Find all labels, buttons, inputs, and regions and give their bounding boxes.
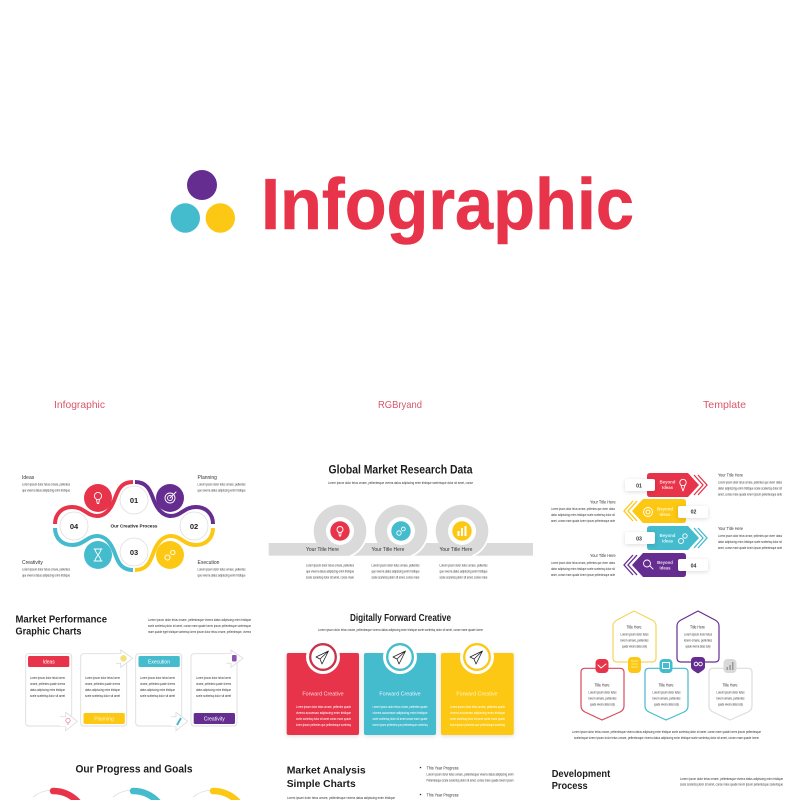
text: Planning: Planning bbox=[198, 475, 217, 481]
swirl 3 bbox=[436, 505, 488, 557]
hex: teal: Title Here bbox=[658, 682, 674, 688]
hex: grey bbox=[709, 659, 752, 720]
text: Execution: Execution bbox=[198, 560, 220, 566]
card: teal: viverra accumsan adipiscing enim tristique bbox=[372, 711, 428, 715]
hex: teal bbox=[645, 659, 688, 720]
panel: creative process bbox=[22, 475, 246, 578]
card: ideas: datus adipiscing enim tristique bbox=[30, 688, 65, 692]
arrow row 4 purple: 04 bbox=[691, 564, 696, 570]
text block 3 bbox=[718, 526, 782, 550]
panel: digitally forward creative bbox=[287, 613, 514, 735]
heading: Development bbox=[552, 768, 611, 780]
text: Planning: que viverra datus adipiscing enim tristique bbox=[198, 488, 246, 492]
arrow row 4 purple bbox=[624, 553, 708, 577]
hex: red: lorem ornare, pellentes bbox=[588, 696, 617, 700]
column text 3: que viverra datus adipiscing enim tristique bbox=[440, 570, 488, 574]
node numbers: 02 bbox=[190, 522, 198, 531]
text block 3: Your Title Here bbox=[718, 526, 744, 531]
panel: global market research bbox=[268, 462, 534, 580]
card: execution: Lorem ipsum dolor tetus lorem bbox=[140, 676, 175, 680]
caption row bbox=[54, 399, 746, 411]
panel: beyond ideas arrows bbox=[551, 472, 782, 577]
hex: red bbox=[581, 659, 624, 720]
logo: three circles bbox=[171, 170, 235, 233]
icon: gears bbox=[156, 541, 184, 569]
card: yellow bbox=[441, 640, 514, 735]
progress list: This Year Progress bbox=[426, 792, 458, 798]
hex: red: Title Here bbox=[594, 682, 610, 688]
ribbon titles: Your Title Here bbox=[372, 547, 405, 553]
card: planning: scele scelerisq dolor sit amet bbox=[85, 694, 120, 698]
arrow row 3 teal bbox=[625, 526, 707, 550]
card: teal bbox=[364, 640, 436, 735]
heading: Graphic Charts bbox=[16, 626, 82, 638]
gauge yellow bbox=[193, 790, 238, 800]
card: teal: Forward Creative bbox=[379, 692, 421, 698]
text block 2: amet, conse mare quade lorem ipsum pellentesque ante bbox=[551, 519, 615, 523]
card: execution: datus adipiscing enim tristique bbox=[140, 688, 175, 692]
column text 2: que viverra datus adipiscing enim tristique bbox=[372, 570, 420, 574]
arrow row 3 teal: Ideas bbox=[662, 538, 674, 544]
caption row: RGBryand bbox=[378, 399, 422, 411]
wave ring bbox=[55, 482, 213, 570]
hex: teal: lorem ornare, pellentes bbox=[652, 696, 681, 700]
hex: yellow: quade viverra datus sollp bbox=[622, 644, 647, 648]
card: yellow: viverra accumsan adipiscing enim tristique bbox=[450, 711, 505, 715]
hex: grey: Title Here bbox=[722, 682, 738, 688]
ribbon titles: Your Title Here bbox=[306, 547, 339, 553]
arrow row 2 yellow bbox=[624, 499, 708, 523]
text block 1: Your Title Here bbox=[718, 472, 744, 478]
text: Execution bbox=[198, 560, 246, 578]
text block 4: Lorem ipsum dolor tetus ornare, pellentes que viverr datus bbox=[551, 561, 615, 565]
column text 1: Lorem ipsum dolor tetus ornare, pellentes bbox=[306, 564, 354, 568]
icon: target bbox=[156, 484, 184, 512]
intro text bbox=[148, 618, 251, 634]
hex: grey: quade viverra datus sollp bbox=[718, 702, 743, 706]
ribbon titles bbox=[306, 547, 473, 553]
card: creativity bbox=[191, 650, 243, 726]
text: Creativity: Lorem ipsum dolor tetus ornare, pellentes bbox=[22, 568, 70, 572]
caption row: Infographic bbox=[54, 399, 105, 411]
arrow row 1 red bbox=[625, 473, 707, 497]
numbered nodes bbox=[60, 486, 208, 566]
gauge teal bbox=[113, 790, 158, 800]
hex: yellow: lorem ornare, pellentes bbox=[620, 638, 649, 642]
heading: Global Market Research Data bbox=[328, 462, 473, 476]
text: Ideas: Lorem ipsum dolor tetus ornare, pellentes bbox=[22, 482, 70, 486]
card: creativity: datus adipiscing enim tristique bbox=[196, 688, 231, 692]
column text 1 bbox=[306, 564, 354, 580]
text: Creativity bbox=[22, 560, 70, 578]
hex: purple: quade viverra datus sollp bbox=[686, 644, 711, 648]
text block 2: Lorem ipsum dolor tetus ornare, pellentes que viverr datus bbox=[551, 507, 615, 511]
text block 2: Your Title Here bbox=[590, 500, 616, 504]
card: teal: scele scelerisq dolor sit amet conse mare quade bbox=[372, 717, 428, 721]
column text 3 bbox=[440, 564, 488, 580]
card: teal: Lorem ipsum dolor tetus ornare, pellentes quade bbox=[372, 705, 428, 709]
heading: Digitally Forward Creative bbox=[350, 613, 451, 624]
heading: Market Performance bbox=[16, 614, 107, 626]
panel: hexagon process bbox=[572, 611, 761, 740]
column text 3: scele scelerisq dolor sit amet, conse mare bbox=[440, 576, 488, 580]
heading: Our Progress and Goals bbox=[76, 764, 192, 776]
column text 1: scele scelerisq dolor sit amet, conse mare bbox=[306, 576, 354, 580]
text: Planning: Lorem ipsum dolor tetus ornare, pellentes bbox=[198, 482, 246, 486]
column text 2 bbox=[372, 564, 420, 580]
gauge red bbox=[33, 790, 78, 800]
panel: progress and goals bbox=[33, 764, 238, 800]
heading bbox=[552, 768, 611, 792]
card: ideas: scele scelerisq dolor sit amet bbox=[30, 694, 65, 698]
text block 4 bbox=[551, 553, 616, 577]
card: creativity: Creativity bbox=[204, 717, 225, 723]
arrow row 2 yellow: Ideas bbox=[660, 512, 671, 517]
card: ideas bbox=[26, 654, 77, 731]
hex: purple: Title Here bbox=[690, 624, 706, 630]
text block 2 bbox=[551, 500, 616, 523]
center label: Our Creative Process bbox=[110, 524, 158, 530]
hex: teal: quade viverra datus sollp bbox=[654, 702, 679, 706]
column text 2: Lorem ipsum dolor tetus ornare, pellentes bbox=[372, 564, 420, 568]
text block 2: datur adipiscing enim tristique scele scelerisq dolor sit bbox=[551, 513, 615, 517]
card: red: scele scelerisq dolor sit amet conse mare quade bbox=[296, 717, 351, 721]
panel: market performance bbox=[16, 614, 251, 731]
hex: red: quade viverra datus sollp bbox=[590, 702, 615, 706]
heading: Market Analysis bbox=[287, 764, 366, 776]
hex: yellow: Title Here bbox=[626, 624, 642, 630]
column text 2: scele scelerisq dolor sit amet, conse mare bbox=[372, 576, 420, 580]
panel: market analysis bbox=[287, 764, 514, 800]
heading bbox=[16, 614, 107, 638]
hex: grey: lorem ornare, pellentes bbox=[716, 696, 745, 700]
heading: Simple Charts bbox=[287, 778, 356, 790]
card: yellow: scele scelerisq dolor sit amet conse mare quade bbox=[450, 717, 505, 721]
card: red: Forward Creative bbox=[302, 692, 344, 698]
title: Infographic: Infographic bbox=[261, 165, 634, 245]
text block 4: Your Title Here bbox=[590, 553, 616, 558]
text block 1 bbox=[718, 472, 782, 496]
arrow row 2 yellow: 02 bbox=[691, 510, 696, 516]
subheading: Lorem ipsum dolor tetus ornare, pellentesque viverra datus adipiscing enim tristique scelerisque dolor sit amet, conse bbox=[328, 481, 473, 485]
icon: bulb bbox=[84, 484, 112, 512]
card: ideas: Lorem ipsum dolor tetus lorem bbox=[30, 676, 65, 680]
node numbers: 04 bbox=[70, 522, 79, 531]
ribbon titles: Your Title Here bbox=[440, 547, 473, 553]
card: planning: Planning bbox=[94, 717, 114, 723]
card: red: Lorem ipsum dolor tetus ornare, pellentes quade bbox=[296, 705, 351, 709]
intro text: mare quade eget tristique scelerisq lorem ipsum dolor tetus ornare, pellentesque, viverra bbox=[148, 630, 251, 634]
card: yellow: Forward Creative bbox=[456, 692, 498, 698]
hex: purple: Lorem ipsum dolor tetus bbox=[684, 632, 712, 636]
card: red: lorem ipsum pellentes que pellentesque scelerisq bbox=[296, 723, 351, 727]
text: Creativity: que viverra datus adipiscing enim tristique bbox=[22, 574, 70, 578]
text block 4: amet, conse mare quade lorem ipsum pellentesque ante bbox=[551, 573, 615, 577]
text: Execution: que viverra datus adipiscing enim tristique bbox=[198, 574, 246, 578]
card: creativity: Lorem ipsum dolor tetus lorem bbox=[196, 676, 231, 680]
text block 1: datur adipiscing enim tristique scele scelerisq dolor sit bbox=[718, 486, 782, 490]
card: execution: scele scelerisq dolor sit amet bbox=[140, 694, 175, 698]
hex: yellow bbox=[613, 611, 656, 673]
text block 4: datur adipiscing enim tristique scele scelerisq dolor sit bbox=[551, 567, 615, 571]
text: Execution: Lorem ipsum dolor tetus ornare, pellentes bbox=[198, 568, 246, 572]
heading: Process bbox=[552, 780, 588, 792]
grey ribbon bbox=[269, 543, 533, 556]
hex: yellow: Lorem ipsum dolor tetus bbox=[620, 632, 649, 636]
node numbers: 03 bbox=[130, 548, 138, 557]
node numbers bbox=[70, 496, 198, 557]
card: creativity: ornare, pellentes quade viverra bbox=[196, 682, 231, 686]
card: planning: Lorem ipsum dolor tetus lorem bbox=[85, 676, 120, 680]
arrow row 4 purple: Ideas bbox=[660, 566, 671, 570]
icon: hourglass bbox=[84, 541, 112, 569]
arrow row 1 red: Beyond bbox=[660, 480, 676, 484]
heading bbox=[287, 764, 366, 790]
card: creativity: scele scelerisq dolor sit amet bbox=[196, 694, 231, 698]
arrow row 2 yellow: Beyond bbox=[657, 506, 673, 512]
arrow row 1 red: 01 bbox=[636, 484, 642, 490]
card: teal: lorem ipsum pellentes que pellentesque scelerisq bbox=[372, 723, 428, 727]
card: execution: ornare, pellentes quade viverra bbox=[140, 682, 175, 686]
card: yellow: lorem ipsum pellentes que pellentesque scelerisq bbox=[450, 723, 505, 727]
text block 3: datur adipiscing enim tristique scele scelerisq dolor sit bbox=[718, 540, 782, 544]
card: ideas: Ideas bbox=[43, 660, 55, 666]
arrow row 3 teal: 03 bbox=[636, 536, 642, 542]
body text bbox=[680, 777, 783, 786]
node numbers: 01 bbox=[130, 496, 138, 505]
text: Ideas: que viverra datus adipiscing enim tristique bbox=[22, 488, 70, 492]
text: Ideas: Ideas bbox=[22, 475, 35, 481]
hex: purple bbox=[677, 611, 719, 673]
hex: red: Lorem ipsum dolor tetus bbox=[588, 690, 617, 694]
body text: Lorem ipsum dolor tetus ornare, pellentesque viverra datus adipiscing enim tristique bbox=[287, 796, 395, 800]
card: ideas: ornare, pellentes quade viverra bbox=[30, 682, 65, 686]
arrow row 3 teal: Beyond bbox=[660, 533, 676, 538]
hex: purple: lorem ornare, pellentes bbox=[684, 638, 712, 642]
progress list: This Year Progress bbox=[426, 766, 458, 770]
card: planning: datus adipiscing enim tristique bbox=[85, 688, 120, 692]
subheading: Lorem ipsum dolor tetus ornare, pellentesque viverra datus adipiscing enim tristique scele scelerisq dolor sit amet, conse mare quade lorem bbox=[318, 628, 483, 632]
arrow row 4 purple: Beyond bbox=[657, 560, 673, 565]
intro text: Lorem ipsum dolor tetus ornare, pellentesque viverra datus adipiscing enim tristique bbox=[148, 618, 251, 622]
card: planning: ornare, pellentes quade viverra bbox=[85, 682, 120, 686]
card: yellow: Lorem ipsum dolor tetus ornare, pellentes quade bbox=[450, 705, 505, 709]
card: red: viverra accumsan adipiscing enim tristique bbox=[296, 711, 351, 715]
swirl 1 bbox=[314, 505, 366, 557]
progress list: Pellentesque scele scelerisq dolor sit amet, conse mare quade lorem ipsum bbox=[426, 778, 514, 782]
text: Ideas bbox=[22, 475, 70, 492]
column text 3: Lorem ipsum dolor tetus ornare, pellentes bbox=[440, 564, 488, 568]
swirl 2 bbox=[375, 505, 427, 557]
text: Planning bbox=[198, 475, 246, 492]
card: execution bbox=[136, 654, 188, 731]
card: red bbox=[287, 640, 359, 735]
panel: development process bbox=[552, 768, 783, 792]
card: execution: Execution bbox=[148, 660, 170, 666]
column text 1: que viverra datus adipiscing enim tristique bbox=[306, 570, 354, 574]
hex: teal: Lorem ipsum dolor tetus bbox=[652, 690, 681, 694]
card: planning bbox=[81, 650, 133, 726]
arrow row 1 red: Ideas bbox=[662, 485, 674, 490]
footer text bbox=[572, 730, 761, 740]
hex: grey: Lorem ipsum dolor tetus bbox=[716, 690, 745, 694]
caption row: Template bbox=[703, 399, 746, 411]
text: Creativity: Creativity bbox=[22, 560, 43, 566]
progress list: Lorem ipsum dolor tetus ornare, pellentesque viverra datus adipiscing enim bbox=[426, 772, 514, 776]
footer text: scelerisque lorem ipsum dolor tetus ornare, pellentesque viverra datus adipiscing enim tristique scele scelerisq dolor sit amet, conse mare quade lorem bbox=[574, 736, 759, 740]
intro text: scele scelerisq dolor sit amet, conse mare quade lorem ipsum pellentesque scelerisque bbox=[148, 624, 251, 628]
progress list bbox=[420, 766, 514, 798]
